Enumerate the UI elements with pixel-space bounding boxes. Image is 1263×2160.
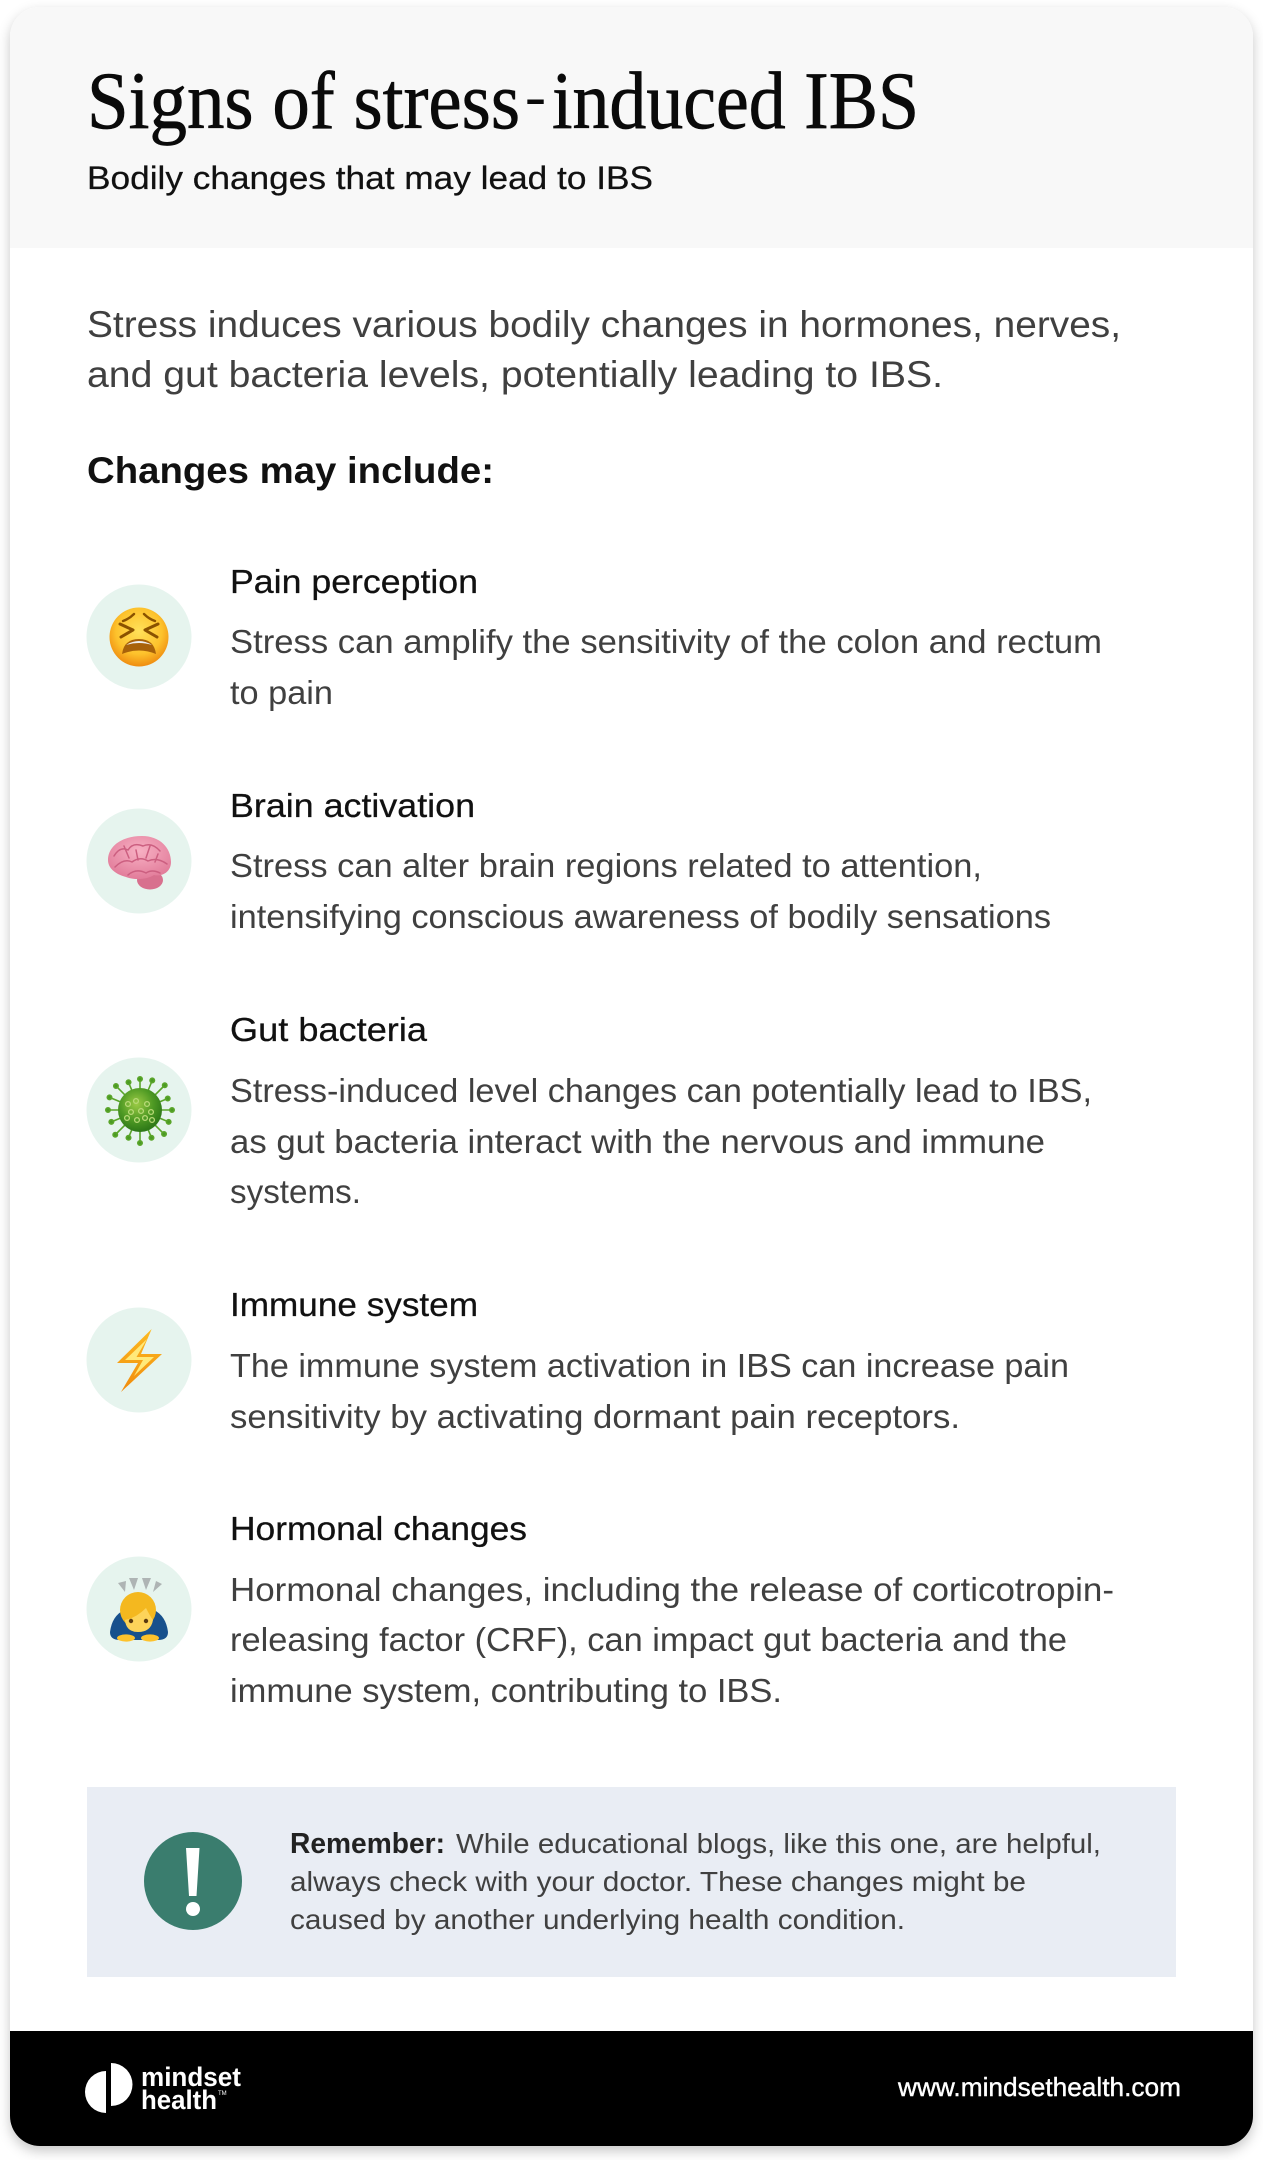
item description: immune system, contributing to IBS. <box>230 1672 782 1709</box>
callout text: always check with your doctor. These changes might be <box>290 1866 1026 1897</box>
item description: systems. <box>230 1173 361 1210</box>
item description <box>230 1571 1114 1709</box>
item heading: Brain activation <box>230 787 475 824</box>
item description <box>230 623 1102 711</box>
callout text: caused by another underlying health condition. <box>290 1904 905 1935</box>
icon: tired face <box>86 584 192 690</box>
item description: to pain <box>230 674 333 711</box>
item description <box>230 1347 1069 1435</box>
header panel <box>90 70 915 196</box>
icon: microbe <box>86 1058 192 1162</box>
item description: Stress can alter brain regions related to attention, <box>230 847 982 884</box>
title: induced IBS <box>552 55 919 146</box>
intro paragraph <box>87 304 1121 395</box>
item description: Stress can amplify the sensitivity of the colon and rectum <box>230 623 1102 660</box>
item heading: Gut bacteria <box>230 1011 428 1048</box>
item description: sensitivity by activating dormant pain receptors. <box>230 1398 960 1435</box>
callout text: While educational blogs, like this one, are helpful, <box>456 1828 1101 1859</box>
logo: health <box>141 2085 217 2115</box>
logo: TM <box>218 2091 227 2097</box>
item description: releasing factor (CRF), can impact gut bacteria and the <box>230 1621 1067 1658</box>
title: - <box>525 63 546 129</box>
item: immune system <box>86 1286 1069 1435</box>
title: Signs of stress <box>87 55 520 146</box>
icon: lightning bolt <box>86 1308 192 1412</box>
callout text <box>290 1828 1101 1935</box>
item heading: Immune system <box>230 1286 478 1323</box>
item: pain perception <box>86 563 1102 711</box>
logo: mindset <box>141 2062 241 2092</box>
icon: exclamation <box>144 1832 242 1930</box>
footer bar <box>10 2031 1253 2146</box>
item heading: Pain perception <box>230 563 478 600</box>
callout text: Remember: <box>290 1828 445 1860</box>
item description <box>230 1072 1092 1210</box>
item description: Hormonal changes, including the release of corticotropin- <box>230 1571 1114 1608</box>
item heading: Hormonal changes <box>230 1510 527 1547</box>
item: brain activation <box>86 787 1051 935</box>
subtitle: Bodily changes that may lead to IBS <box>87 160 653 196</box>
item: hormonal changes <box>86 1510 1114 1709</box>
item description: intensifying conscious awareness of bodily sensations <box>230 898 1051 935</box>
item description: The immune system activation in IBS can increase pain <box>230 1347 1069 1384</box>
section heading: Changes may include: <box>87 450 494 491</box>
intro paragraph: Stress induces various bodily changes in hormones, nerves, <box>87 304 1121 345</box>
item: gut bacteria <box>86 1011 1092 1210</box>
item description: Stress-induced level changes can potentially lead to IBS, <box>230 1072 1092 1109</box>
item description: as gut bacteria interact with the nervous and immune <box>230 1123 1045 1160</box>
intro paragraph: and gut bacteria levels, potentially leading to IBS. <box>87 354 943 395</box>
icon: bowing person <box>86 1556 192 1662</box>
website url: www.mindsethealth.com <box>897 2072 1181 2102</box>
icon: brain <box>86 808 192 914</box>
item description <box>230 847 1051 935</box>
logo <box>85 2062 241 2115</box>
callout: remember <box>87 1787 1176 1977</box>
